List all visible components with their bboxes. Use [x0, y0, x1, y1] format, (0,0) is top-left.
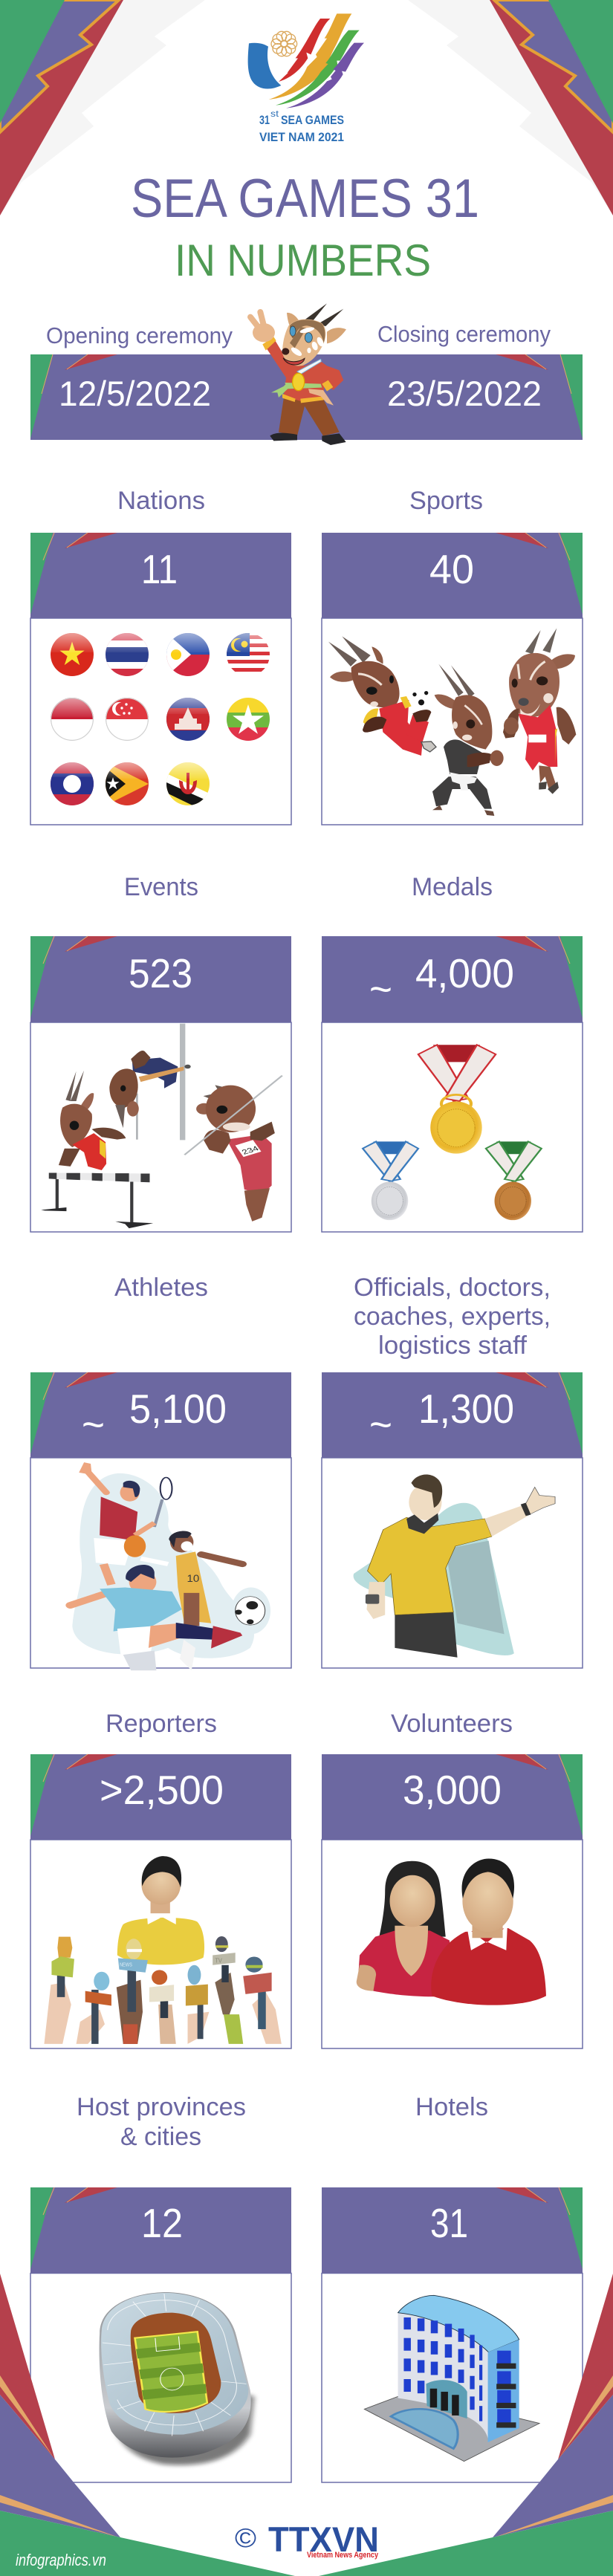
illustration: athletics goats: [41, 1024, 282, 1228]
flag: Brunei: [166, 762, 210, 805]
logo: 31st SEA Games Viet Nam 2021: [248, 13, 364, 144]
logo: 31st SEA Games Viet Nam 2021: SEA GAMES: [281, 113, 344, 127]
number header: [30, 1372, 291, 1458]
illustration: athletics goats: 234: [241, 1145, 261, 1156]
illustration: medals: [363, 1045, 542, 1220]
number header: [30, 936, 291, 1022]
flag: Indonesia: [51, 698, 94, 741]
label: closing ceremony: Closing ceremony: [377, 321, 551, 347]
number: 1,300: 1,300: [418, 1386, 514, 1432]
card: volunteers: [322, 1710, 583, 2048]
card frame: [322, 618, 583, 825]
number: >2,500: >2,500: [100, 1767, 224, 1813]
card frame: [322, 1022, 583, 1232]
label: hotels: Hotels: [415, 2093, 488, 2121]
label: host provinces & cities: [77, 2093, 246, 2151]
label: host provinces & cities: & cities: [120, 2123, 201, 2151]
bottom left corner decoration: [0, 2274, 295, 2576]
card: hotels: [322, 2093, 583, 2482]
label: athletes: Athletes: [114, 1274, 208, 1302]
card: sports: [322, 487, 583, 825]
flag: Thailand: [106, 633, 149, 676]
logo: copyright TTXVN: ©: [235, 2523, 256, 2553]
mic: orange: [160, 1997, 168, 2018]
number: 31: 31: [430, 2200, 468, 2246]
title: SEA GAMES 31: [131, 169, 479, 229]
illustration: three goat mascots: [328, 628, 576, 816]
label: opening ceremony: Opening ceremony: [46, 322, 233, 348]
illustration: referee: [354, 1475, 555, 1658]
label: medals: Medals: [412, 873, 493, 901]
card frame: [30, 1022, 291, 1232]
mic: blue: [91, 1990, 99, 2044]
number: 11: 11: [141, 546, 178, 592]
background decoration: faint top shapes: [0, 0, 613, 215]
label: officials, doctors, coaches, experts, logistics staff: Officials, doctors,: [354, 1274, 551, 1302]
label: events: Events: [124, 873, 198, 901]
top right corner decoration: [490, 0, 613, 215]
number header: [30, 533, 291, 618]
flag: Myanmar: [227, 698, 270, 741]
number header: [322, 533, 583, 618]
card frame: [322, 1458, 583, 1668]
card frame: [30, 1840, 291, 2048]
number header: [322, 2187, 583, 2274]
illustration: sports players: 10: [187, 1572, 199, 1584]
label: officials, doctors, coaches, experts, logistics staff: [354, 1274, 551, 1360]
number header: [322, 936, 583, 1022]
card: host provinces: [30, 2093, 291, 2482]
card frame: [30, 618, 291, 825]
logo: 31st SEA Games Viet Nam 2021: st: [270, 108, 279, 119]
logo: 31st SEA Games Viet Nam 2021: VIET NAM 2021: [259, 130, 344, 144]
card frame: [30, 1458, 291, 1668]
number: 40: 40: [429, 546, 474, 592]
illustration: stadium: [99, 2292, 254, 2465]
flags: [51, 633, 270, 814]
approx sign: ~: [369, 1401, 392, 1447]
mic: red box: [258, 1990, 266, 2029]
label: nations: Nations: [117, 487, 205, 515]
number: 523: 523: [129, 950, 192, 996]
number: 12: 12: [141, 2200, 183, 2246]
card: athletes: [30, 1274, 291, 1670]
label: reporters: Reporters: [106, 1710, 217, 1738]
number header: [322, 1754, 583, 1840]
number header: [322, 1372, 583, 1458]
illustration: hotel: [364, 2295, 539, 2462]
bottom right corner decoration: [319, 2274, 613, 2576]
logo: copyright TTXVN: Vietnam News Agency: [307, 2551, 379, 2560]
subtitle: IN NUMBERS: [175, 236, 431, 285]
bronze medal: [486, 1141, 542, 1220]
logo: copyright TTXVN: TTXVN: [268, 2520, 379, 2559]
flag: Laos: [51, 762, 94, 805]
number header: [30, 1754, 291, 1840]
card: nations: [30, 487, 291, 825]
flag: Cambodia: [166, 698, 210, 741]
label: officials, doctors, coaches, experts, logistics staff: logistics staff: [378, 1331, 528, 1360]
mascot: waving goat: [250, 303, 346, 445]
card: officials: [322, 1274, 583, 1668]
flag: Malaysia: [227, 633, 270, 672]
silver medal: [363, 1141, 418, 1220]
flag: Singapore: [106, 698, 149, 741]
label: officials, doctors, coaches, experts, logistics staff: coaches, experts,: [354, 1302, 551, 1331]
approx sign: ~: [82, 1401, 105, 1447]
illustration: reporter and microphones: NEWS: [120, 1962, 132, 1968]
number: 4,000: 4,000: [415, 950, 514, 996]
illustration: reporter and microphones: TV: [215, 1958, 222, 1965]
mic arms: [44, 1982, 71, 2044]
gold medal: [418, 1045, 496, 1154]
top left corner decoration: [0, 0, 123, 215]
card frame: [322, 2274, 583, 2482]
mic: teal: [198, 2002, 204, 2039]
illustration: two volunteers: [357, 1859, 546, 2005]
flag: Philippines: [166, 633, 210, 676]
card: events: [30, 873, 291, 1232]
label: host provinces & cities: Host provinces: [77, 2093, 246, 2121]
label: volunteers: Volunteers: [391, 1710, 513, 1738]
card frame: [322, 1840, 583, 2048]
mic: TV grey: [221, 1965, 229, 1982]
closing date: 23/5/2022: [387, 374, 542, 413]
flag: Vietnam: [51, 633, 94, 676]
card: medals: [322, 873, 583, 1232]
mic: TV green: [57, 1975, 65, 1997]
number header: [30, 2187, 291, 2274]
illustration: sports players: [71, 1462, 270, 1670]
card frame: [30, 2274, 291, 2482]
mic: NEWS: [128, 1970, 136, 2012]
label: sports: Sports: [409, 487, 483, 515]
illustration: reporter and microphones: [44, 1856, 282, 2044]
logo: 31st SEA Games Viet Nam 2021: 31: [259, 113, 270, 127]
approx sign: ~: [369, 966, 392, 1012]
flag: Timor-Leste: [106, 762, 149, 805]
number: 3,000: 3,000: [403, 1767, 502, 1813]
source: infographics.vn: infographics.vn: [16, 2551, 106, 2569]
number: 5,100: 5,100: [129, 1386, 227, 1432]
opening date: 12/5/2022: [59, 374, 211, 413]
date band: [30, 354, 583, 440]
card: reporters: [30, 1710, 291, 2048]
